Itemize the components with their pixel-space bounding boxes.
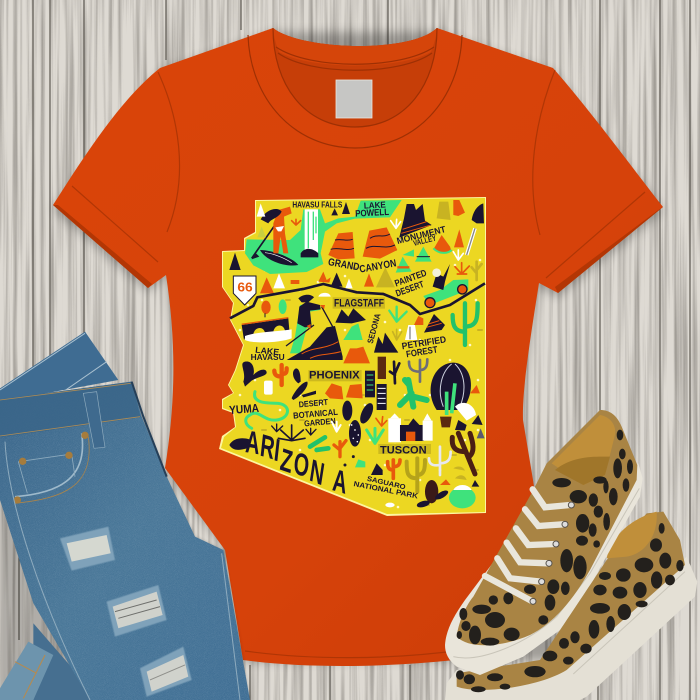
Petrified Forest label: PETRIFIED <box>401 334 447 351</box>
Arizona title: ARIZONA <box>244 423 349 501</box>
mountain <box>287 326 343 360</box>
Havasu Falls label: HAVASU FALLS <box>292 200 343 209</box>
back shoe <box>445 512 697 700</box>
Grand Canyon label <box>327 257 397 276</box>
hot air balloon cactus <box>431 363 480 427</box>
green cairn <box>343 323 363 340</box>
petrified log small <box>264 381 273 395</box>
shirt shadow <box>53 32 663 662</box>
side seam <box>5 442 240 700</box>
olive saguaro <box>407 458 425 492</box>
small painted mesas <box>396 228 475 273</box>
collar <box>248 28 462 148</box>
Petrified Forest label <box>401 334 447 359</box>
desert plants north <box>292 219 482 340</box>
Lake Havasu label <box>251 345 285 362</box>
main jeans body <box>0 382 250 700</box>
Saguaro National Park label: SAGUARO <box>366 476 407 492</box>
pale saguaro <box>429 447 451 475</box>
Tuscon label: TUSCON <box>380 444 427 456</box>
leopard sneakers <box>445 410 697 700</box>
Mission San Xavier church <box>388 413 433 442</box>
jeans <box>0 332 253 700</box>
big brown saguaro <box>452 433 475 474</box>
Havasu Falls waterfall <box>301 209 318 257</box>
Petrified Forest label: FOREST <box>405 344 438 359</box>
orange small cactus <box>388 460 400 478</box>
route 66 sign: 66 <box>237 279 253 294</box>
prickly pear centre <box>342 401 376 447</box>
northern map section <box>229 200 485 362</box>
Monument Valley label: VALLEY <box>412 233 438 248</box>
jeep with driver <box>423 264 468 308</box>
dark rock east <box>455 415 485 438</box>
t-shirt <box>53 28 663 666</box>
Lake Powell label <box>355 200 390 219</box>
Desert Botanical Garden label: GARDEN <box>304 416 336 428</box>
prickly pear south <box>416 480 449 509</box>
Saguaro National Park label: NATIONAL PARK <box>353 479 420 501</box>
Painted Desert label: DESERT <box>394 279 425 299</box>
Desert Botanical Garden label: BOTANICAL <box>293 407 339 421</box>
map sprinkles <box>240 212 482 507</box>
paddleboarder <box>252 207 298 266</box>
rips <box>60 527 192 697</box>
petrified logs <box>405 314 445 340</box>
Desert Botanical Garden label <box>293 397 339 428</box>
Grand Canyon rock formations <box>328 227 397 259</box>
Sedona label: SEDONA <box>365 312 383 345</box>
denim texture <box>0 380 253 700</box>
orange and cream trees <box>260 267 395 293</box>
laces <box>485 489 570 601</box>
Flagstaff rocks <box>335 308 366 323</box>
London Bridge at Lake Havasu <box>242 318 292 342</box>
front pocket <box>14 432 89 504</box>
hiker <box>286 293 333 353</box>
orange cactus <box>274 365 287 385</box>
Painted Desert label: PAINTED <box>393 268 428 289</box>
rolled cuff <box>0 642 53 700</box>
Arizona map print <box>219 197 486 516</box>
Flagstaff label: FLAGSTAFF <box>334 297 384 309</box>
Desert Botanical Garden label: DESERT <box>298 397 328 409</box>
prickly pear west <box>242 361 316 400</box>
Route 66 road <box>230 283 485 318</box>
southern map section <box>229 347 485 509</box>
front upper <box>457 410 637 645</box>
back leg <box>33 623 100 700</box>
back waistband fold <box>0 332 118 402</box>
vases <box>261 299 287 317</box>
Monument Valley buttes <box>399 200 484 237</box>
small dashes and yellow hills <box>385 467 479 507</box>
Monument Valley label: MONUMENT <box>396 224 447 246</box>
jeans shadow <box>0 383 250 700</box>
small green mound <box>355 459 365 467</box>
Sedona rocks <box>374 333 398 353</box>
lake and river <box>245 200 402 274</box>
Grand Canyon label: CANYON <box>359 258 397 276</box>
pine trees north <box>229 202 350 287</box>
sleeve undersides <box>53 205 663 293</box>
green cactus and tan cacti centre-north <box>390 359 427 407</box>
Lake Havasu label: LAKE <box>255 345 280 357</box>
waistband <box>0 382 167 477</box>
front shoe <box>445 410 643 675</box>
phoenix buildings <box>365 357 387 410</box>
route 66 sign <box>233 276 256 305</box>
map outline <box>219 197 486 516</box>
orange rocks <box>325 347 370 399</box>
neck label <box>336 80 372 118</box>
Lake Powell label: LAKE <box>364 200 386 211</box>
Lake Havasu label: HAVASU <box>251 352 285 362</box>
snake <box>246 392 288 428</box>
dark mound <box>371 463 383 475</box>
aloe and cactus plants <box>272 417 387 457</box>
front sole <box>445 463 643 675</box>
Grand Canyon label: GRAND <box>327 257 361 274</box>
barrel cactus <box>449 485 476 508</box>
saguaro green <box>453 303 478 345</box>
Yuma label: YUMA <box>229 402 260 417</box>
Phoenix label: PHOENIX <box>309 370 360 382</box>
sleeve seams and hems <box>72 70 645 658</box>
Painted Desert label <box>393 268 428 299</box>
Lake Powell label: POWELL <box>355 207 390 219</box>
shirt body <box>53 28 663 666</box>
